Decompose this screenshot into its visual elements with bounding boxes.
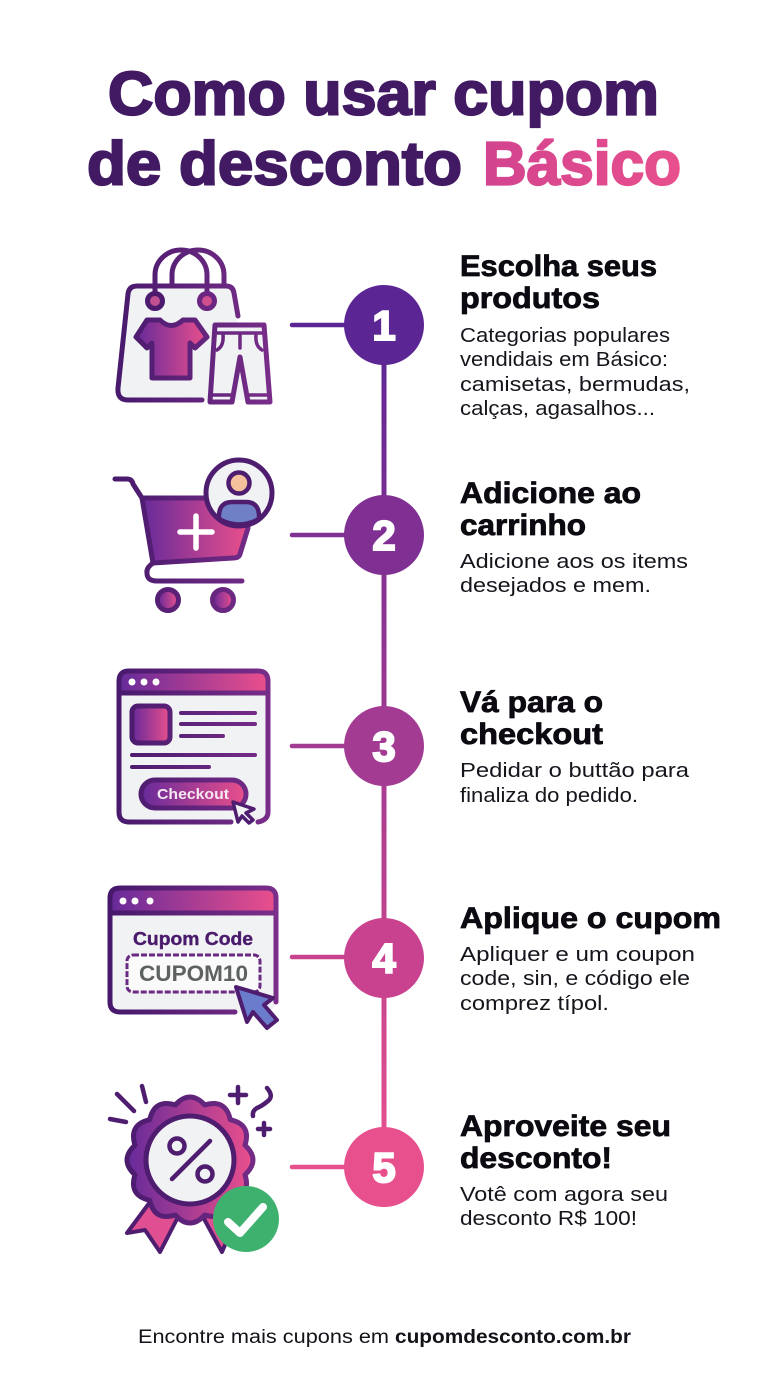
icon: coupon code window (110, 888, 277, 1028)
title (87, 60, 681, 198)
step 2 text: Adicione aos os items (460, 550, 688, 573)
step 3 number (344, 706, 424, 786)
icon: shopping cart with user (115, 460, 272, 610)
step 3 text: Vá para o (460, 686, 603, 719)
icon: coupon code window: CUPOM10 (139, 961, 248, 986)
step 4 text (460, 902, 721, 1015)
title: Como usar cupom (108, 60, 659, 128)
title: de desconto (87, 130, 462, 198)
step 1 text: vendidais em Básico: (460, 348, 668, 371)
step 1 number: 1 (372, 302, 396, 349)
step 3 number: 3 (372, 723, 396, 770)
footer: cupomdesconto.com.br (395, 1327, 632, 1348)
step 1 text: Categorias populares (460, 324, 670, 347)
step 4 text: Aplique o cupom (460, 902, 721, 935)
icon: discount badge (110, 1086, 279, 1252)
timeline (292, 325, 386, 1167)
step 3 text: finaliza do pedido. (460, 784, 638, 807)
step 5 number: 5 (372, 1144, 396, 1191)
step 5 text (460, 1110, 671, 1230)
step 5 text: Votê com agora seu (460, 1183, 668, 1206)
step 2 number: 2 (372, 512, 396, 559)
step 1 text: Escolha seus (460, 250, 657, 283)
icon: checkout window (119, 671, 268, 823)
step 3 text: Pedidar o buttão para (460, 759, 690, 782)
footer (138, 1327, 632, 1348)
step 5 text: desconto! (460, 1142, 612, 1175)
step 2 text (460, 477, 688, 597)
step 3 text (460, 686, 690, 807)
step 2 text: carrinho (460, 509, 586, 542)
step 1 text (460, 250, 690, 420)
step 4 text: Apliquer e um coupon (460, 943, 695, 966)
step 2 number (344, 495, 424, 575)
step 1 text: calças, agasalhos... (460, 397, 655, 420)
icon: green check (213, 1186, 279, 1252)
icon: coupon code window: Cupom Code (133, 929, 253, 949)
step 4 text: comprez típol. (460, 992, 609, 1015)
step 1 text: camisetas, bermudas, (460, 373, 690, 396)
step 2 text: desejados e mem. (460, 574, 651, 597)
step 2 text: Adicione ao (460, 477, 641, 510)
icon: user avatar (206, 460, 272, 526)
step 1 text: produtos (460, 282, 600, 315)
icon: checkout window: Checkout (157, 786, 229, 803)
step 4 text: code, sin, e código ele (460, 967, 690, 990)
step 4 number: 4 (372, 935, 396, 982)
step 3 text: checkout (460, 718, 603, 751)
step 5 text: desconto R$ 100! (460, 1207, 637, 1230)
step 1 number (344, 285, 424, 365)
step 5 text: Aproveite seu (460, 1110, 671, 1143)
step 4 number (344, 918, 424, 998)
title: Básico (483, 130, 681, 198)
step 5 number (344, 1127, 424, 1207)
footer: Encontre mais cupons em (138, 1327, 389, 1348)
icon: shopping bag with clothes (118, 250, 270, 402)
